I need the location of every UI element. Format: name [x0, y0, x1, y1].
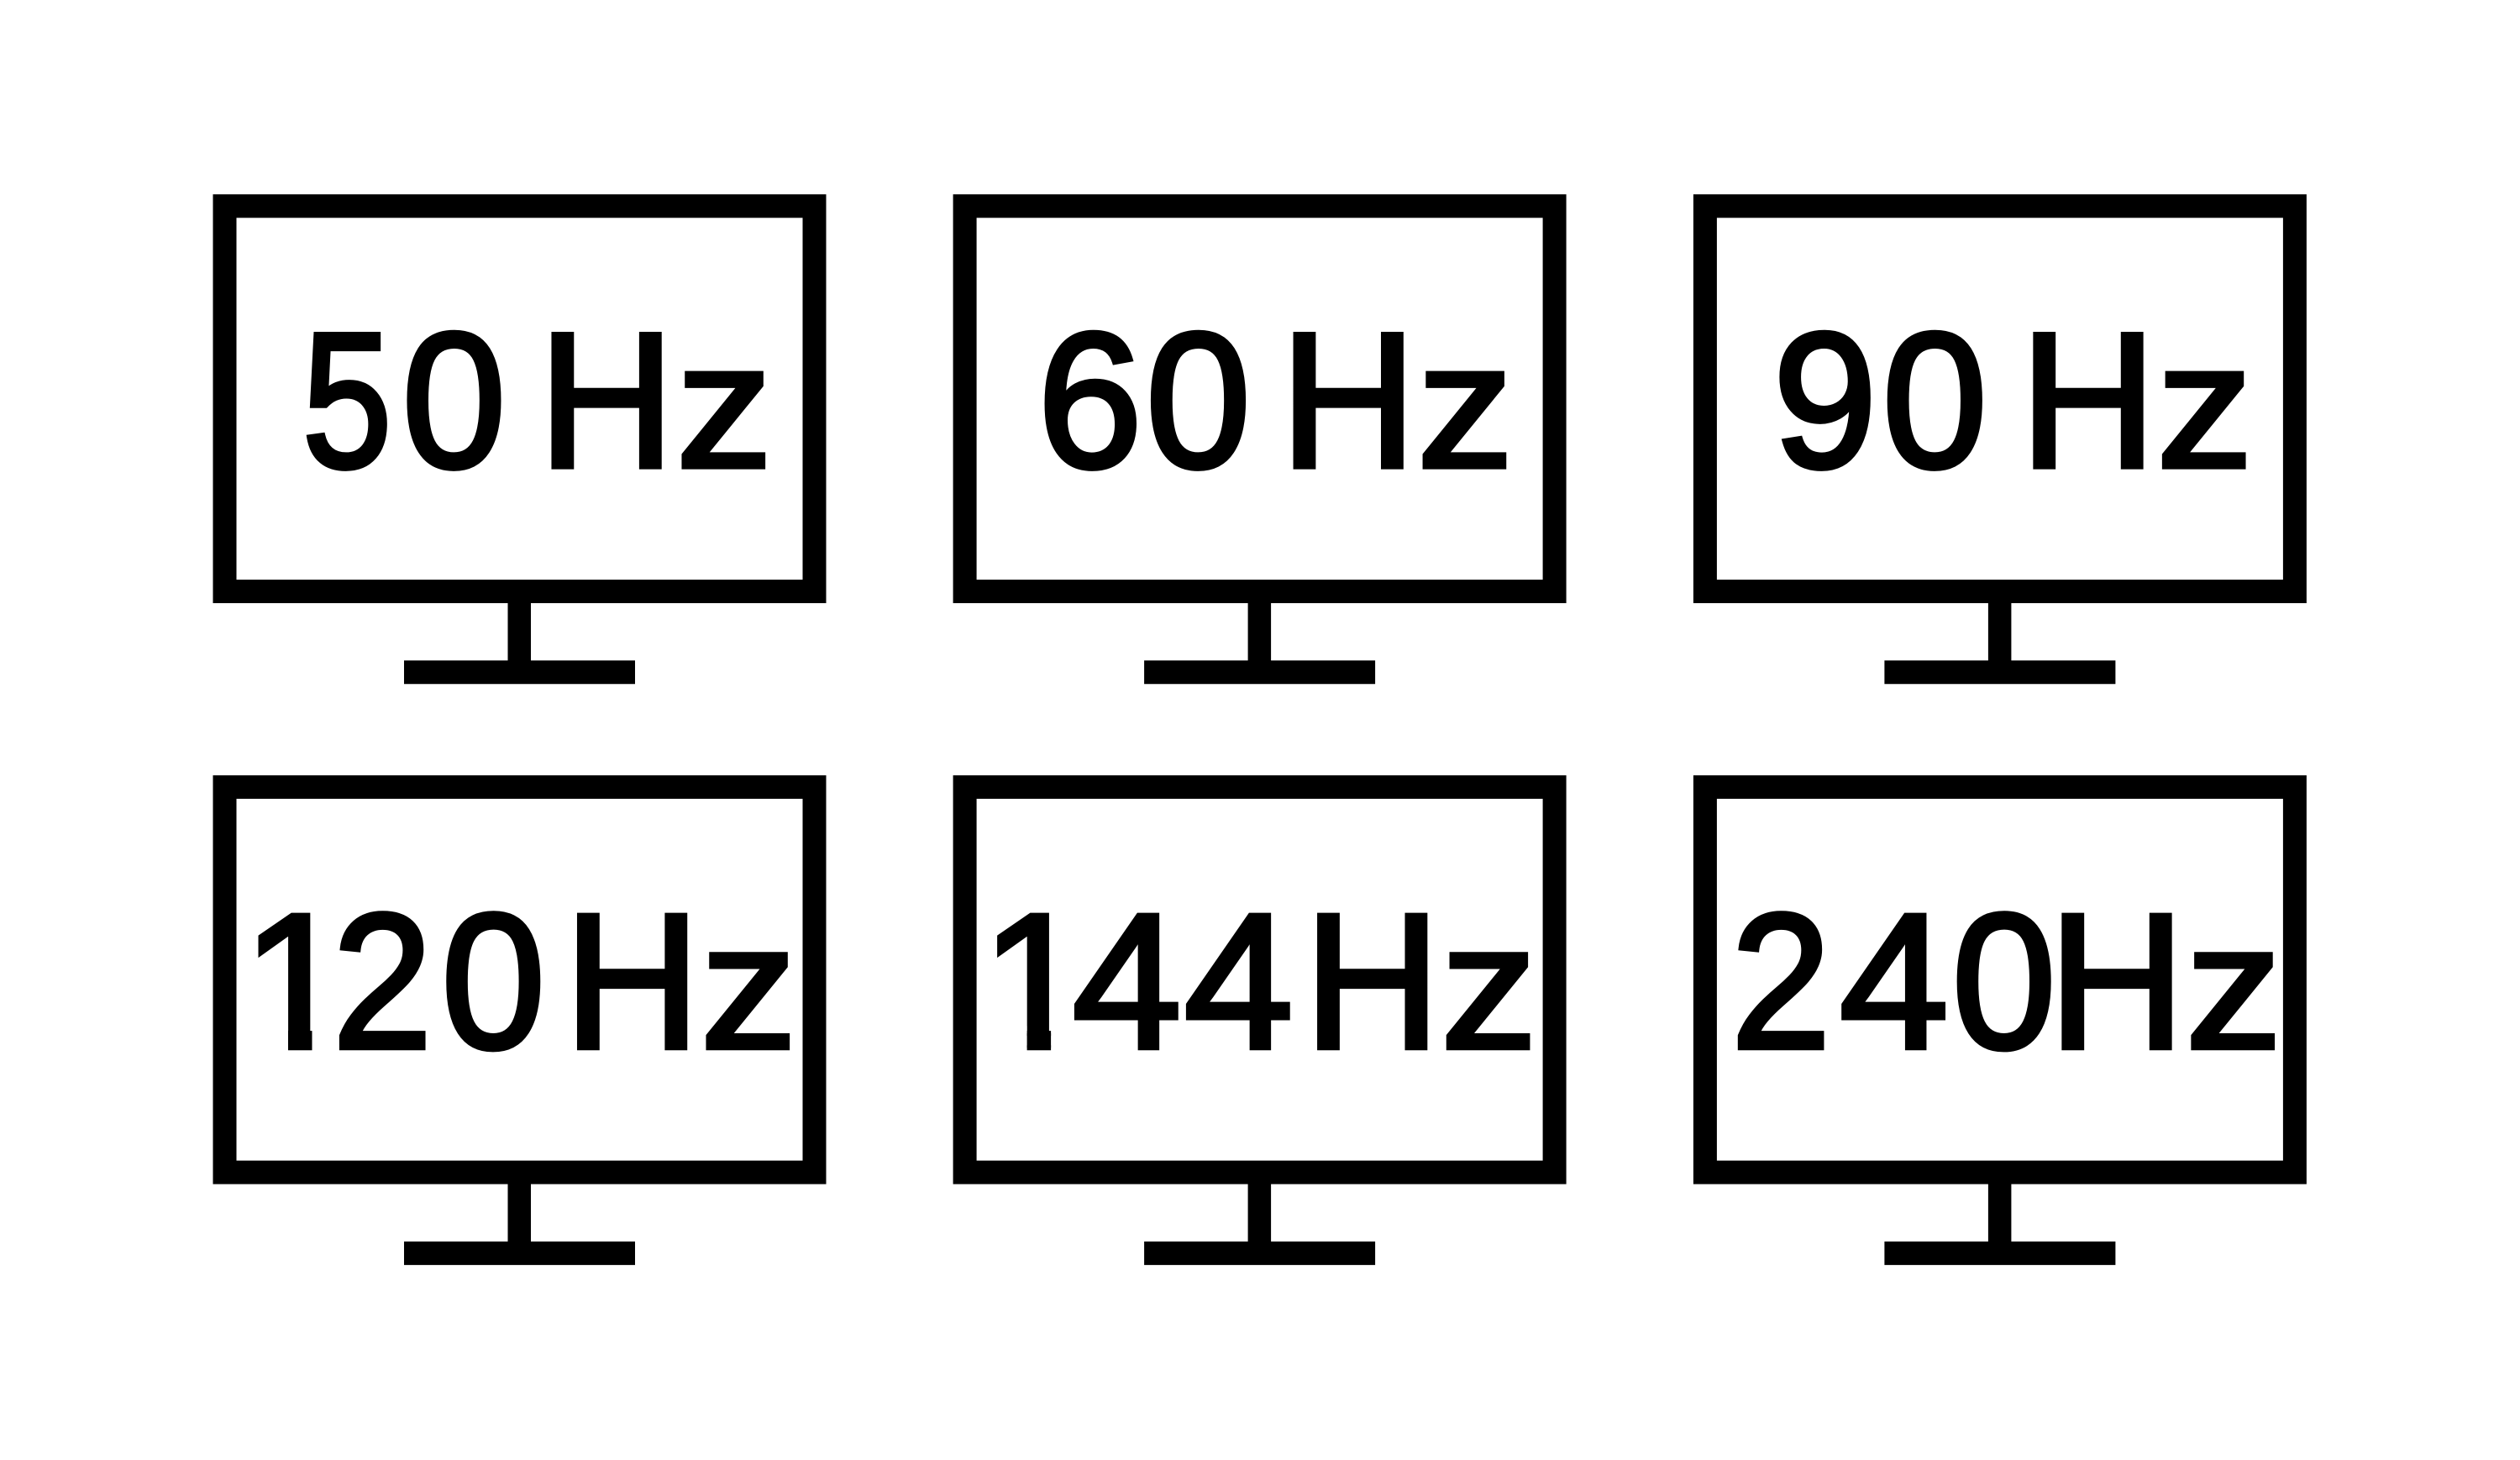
label: 90 Hz: 9 [1773, 293, 1877, 507]
label: 90 Hz [1773, 293, 2253, 508]
label: 240 Hz: 0 [1952, 874, 2055, 1089]
monitor: 90 Hz [1705, 206, 2295, 684]
monitor: 240 Hz [1705, 787, 2295, 1265]
label: 120 Hz: z [701, 889, 796, 1085]
label: 144 Hz: 4 [1073, 874, 1182, 1090]
monitor: 60 Hz [965, 206, 1555, 684]
label: 90 Hz: z [2157, 308, 2253, 505]
monitor: 120 Hz [225, 787, 815, 1265]
label: 60 Hz: 6 [1037, 294, 1142, 508]
monitor: 50 Hz [225, 206, 815, 684]
stand [1144, 602, 1375, 684]
screen frame [1705, 787, 2295, 1173]
label: 144 Hz: z [1441, 889, 1537, 1085]
label: 60 Hz: z [1418, 308, 1513, 505]
label: 144 Hz: H [1305, 874, 1441, 1090]
label: 90 Hz: H [2020, 294, 2156, 508]
label: 50 Hz: z [677, 308, 772, 505]
label: 50 Hz [302, 292, 772, 508]
screen frame [225, 787, 815, 1173]
stand [1884, 1184, 2115, 1265]
label: 120 Hz [259, 911, 790, 1052]
label: 240 Hz: 2 [1731, 874, 1830, 1089]
stand [1144, 1184, 1375, 1265]
label: 144 Hz: 4 [1184, 874, 1294, 1090]
label: 50 Hz: H [538, 294, 675, 508]
stand [404, 1184, 635, 1265]
label: 144 Hz: 1 [981, 874, 1088, 1089]
label: 120 Hz: 2 [333, 874, 432, 1089]
label: 90 Hz: 0 [1882, 294, 1987, 508]
screen frame [1705, 206, 2295, 591]
stand [404, 602, 635, 684]
screen frame [965, 787, 1555, 1173]
label: 120 Hz: 0 [442, 874, 545, 1089]
label: 240 Hz: H [2049, 874, 2185, 1090]
label: 240 Hz: 4 [1840, 874, 1949, 1090]
stand [1884, 602, 2115, 684]
label: 60 Hz: 0 [1146, 294, 1251, 508]
label: 60 Hz [1037, 294, 1513, 508]
screen frame [225, 206, 815, 591]
label: 50 Hz: 0 [402, 293, 506, 507]
label: 50 Hz: 5 [302, 292, 391, 507]
label: 120 Hz: 1 [242, 874, 349, 1089]
label: 144 Hz [997, 912, 1530, 1050]
label: 240 Hz [1731, 874, 2281, 1090]
infographic: six monitors showing refresh rates [213, 194, 2307, 1265]
monitor: 144 Hz [965, 787, 1555, 1265]
label: 120 Hz: H [564, 874, 701, 1090]
screen frame [965, 206, 1555, 591]
label: 240 Hz: z [2186, 889, 2281, 1085]
label: 60 Hz: H [1280, 294, 1416, 508]
